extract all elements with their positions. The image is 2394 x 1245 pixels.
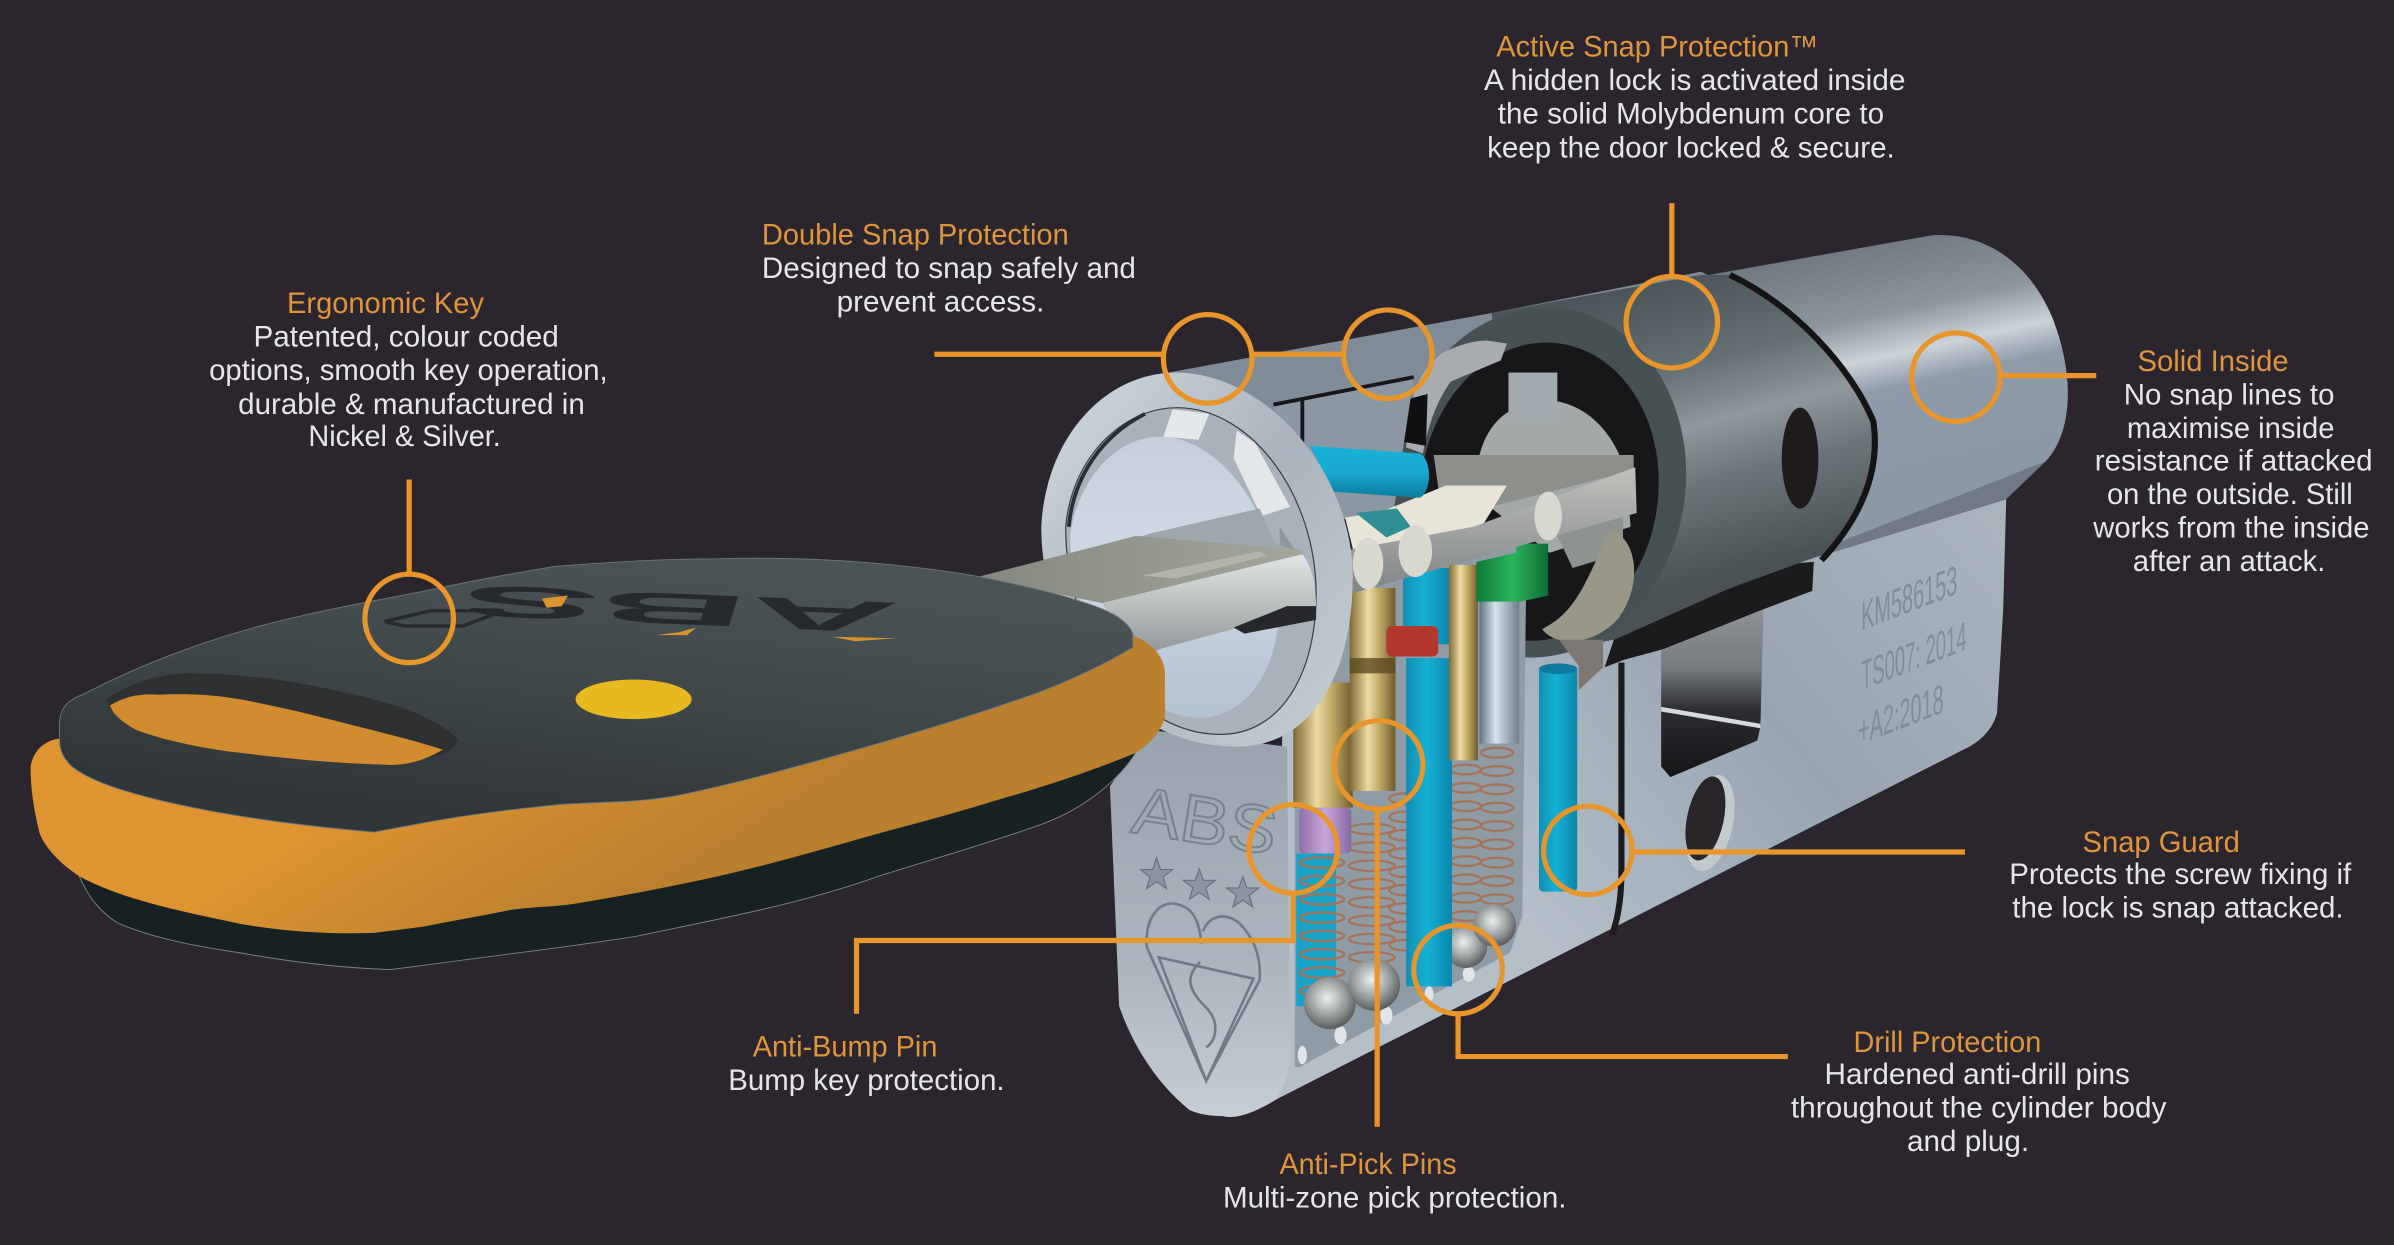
face lettering: ABS [1127,773,1282,870]
callout: anti-bump pin [728,805,1337,1097]
label text [1223,1148,1566,1215]
screw hole opening [1679,773,1732,864]
callout: active snap protection [1484,31,1905,368]
label text: Multi-zone pick protection. [1223,1182,1566,1215]
engraved serial text: KM586153 [1861,557,1957,640]
orange band [31,635,1165,933]
bearing balls [1304,904,1516,1029]
cam slot [1661,609,1763,777]
cam body profile [1276,499,2006,1099]
label text [2009,826,2352,925]
key hole [107,673,458,765]
separate blue pin [1539,666,1577,892]
silver pin [1479,599,1519,744]
key dark body [60,558,1133,832]
blue pin top [1539,663,1577,674]
bevel shine [1163,409,1290,516]
blue upper pin [1403,568,1449,644]
plug plate [1434,455,1634,519]
label text: on the outside. Still [2107,478,2353,511]
grey guard metal [1559,640,1603,690]
label text: Active Snap Protection™ [1496,31,1818,64]
shaft shadow wedge [1234,606,1316,634]
key underside [79,753,1136,970]
screw hole [1677,770,1743,876]
bevel right shade [1279,527,1316,611]
ring [365,574,453,663]
gray plug dome [1466,400,1631,553]
connector line [1375,809,1379,1127]
dark mounting plate [1605,562,1814,667]
small silver cylinder [1508,373,1557,421]
label text: Protects the screw fixing if [2009,858,2352,891]
slot hole [1782,408,1818,508]
lock cylinder illustration: TS007: 2014 [1861,613,1966,700]
blade scallops [1353,492,1562,589]
label text: the solid Molybdenum core to [1498,98,1884,131]
label text: Designed to snap safely and [762,252,1136,285]
label text: Nickel & Silver. [308,420,501,453]
cylinder top strip [1168,272,1741,458]
ring [1334,721,1423,809]
label text: prevent access. [837,285,1044,318]
engraved serial text: +A2:2018 [1858,676,1944,755]
connector line [1670,203,1674,276]
label text: after an attack. [2133,545,2325,578]
engraved serial text [1858,557,1966,755]
three stars [1141,858,1259,907]
purple anti-bump pin [1299,808,1351,854]
connector line [2000,374,2096,377]
label text: Ergonomic Key [287,287,484,320]
ring [1626,276,1718,368]
callout: anti-pick pins [1223,721,1566,1215]
label text [728,1031,1005,1097]
label text: Drill Protection [1854,1026,2041,1059]
disc gray plane [1137,508,1302,553]
screw hole rim [1677,770,1743,876]
connector line [857,893,1293,1014]
label text: Bump key protection. [728,1064,1005,1097]
flange outer rim [1041,373,1353,747]
window panel [1273,377,1414,519]
key emblem [385,611,504,626]
label text: No snap lines to [2124,379,2334,412]
connector line [934,353,1344,356]
label text [762,218,1136,318]
pin cavity background [1295,527,1527,1067]
kitemark emblem [1147,904,1260,1081]
lower right crescent [1542,531,1634,641]
key shaft lower face [1102,554,1316,660]
key blade [1350,467,1637,594]
key shaft top face [977,536,1302,603]
cam slot edge [1661,707,1760,728]
ring [1912,333,2000,421]
label text: resistance if attacked [2095,444,2373,477]
label text: throughout the cylinder body [1791,1092,2167,1125]
label text [1791,1026,2167,1158]
label text: Anti-Bump Pin [753,1031,937,1064]
key ABS logo: ABS [453,575,904,643]
gold pin two [1350,588,1395,791]
ergonomic key illustration [31,558,1165,970]
lower gray area [1550,504,1623,568]
label text: works from the inside [2092,511,2370,544]
label text: Hardened anti-drill pins [1825,1058,2130,1091]
flange inner opening [1066,408,1316,734]
label text: Patented, colour coded [253,321,559,354]
gold pin one [1293,683,1353,808]
label text: Solid Inside [2138,345,2289,378]
label text: keep the door locked & secure. [1487,131,1895,164]
label text [2092,345,2373,578]
gold pin three [1449,565,1478,760]
black window [1392,394,1428,446]
cutaway ring outer [1369,288,1709,677]
yellow button [576,679,692,719]
label text: maximise inside [2127,412,2334,445]
lock cylinder illustration [977,235,2068,1117]
upper body bevel [1817,461,2046,557]
label text [209,287,608,453]
callout: double snap protection [762,218,1432,403]
cavity teeth [1298,966,1475,1064]
ring [1249,805,1337,893]
green pin [1476,544,1548,602]
blue long pin [1406,658,1452,986]
callout: drill protection [1414,925,2167,1158]
connector line [407,479,411,574]
callout: solid inside [1912,333,2373,578]
teal lower pin [1296,854,1336,1006]
label text [1484,31,1905,164]
ring [1544,806,1632,895]
label text: Double Snap Protection [762,218,1069,251]
ring right [1344,310,1432,399]
red pin [1386,626,1438,657]
key hole orange inner [110,694,443,765]
label text: A hidden lock is activated inside [1484,64,1905,97]
top left silver crescent [1406,341,1507,453]
connector line [1632,850,1965,854]
mid cylinder dark section [1492,275,1875,657]
cutaway ring inner black [1400,327,1678,656]
label text: Anti-Pick Pins [1279,1148,1457,1181]
window black line [1273,377,1414,446]
black seam arc [1730,275,1875,560]
ring [1414,925,1502,1014]
connector line [1458,1014,1788,1057]
front profile face [1110,730,1290,1117]
split line [1612,663,1621,934]
cylinder end section [1679,235,2068,568]
callout: ergonomic key [209,287,608,663]
teal cut detail [1356,508,1411,537]
label text: Snap Guard [2083,826,2240,859]
ring left [1163,315,1252,403]
label text: options, smooth key operation, [209,354,608,387]
flat disc [1070,437,1279,718]
flange dark rim arc [1069,414,1145,527]
label text: and plug. [1907,1125,2029,1158]
key logo orange slivers [542,595,896,641]
springs [1298,744,1515,1000]
callout: snap guard [1544,806,2352,925]
shaft wear patch [1142,551,1267,579]
cream blade cuts [1345,486,1507,573]
label text: the lock is snap attacked. [2012,892,2344,925]
gold collar [1350,658,1395,673]
label text: durable & manufactured in [238,388,585,421]
horizontal blue pin [1310,446,1429,498]
